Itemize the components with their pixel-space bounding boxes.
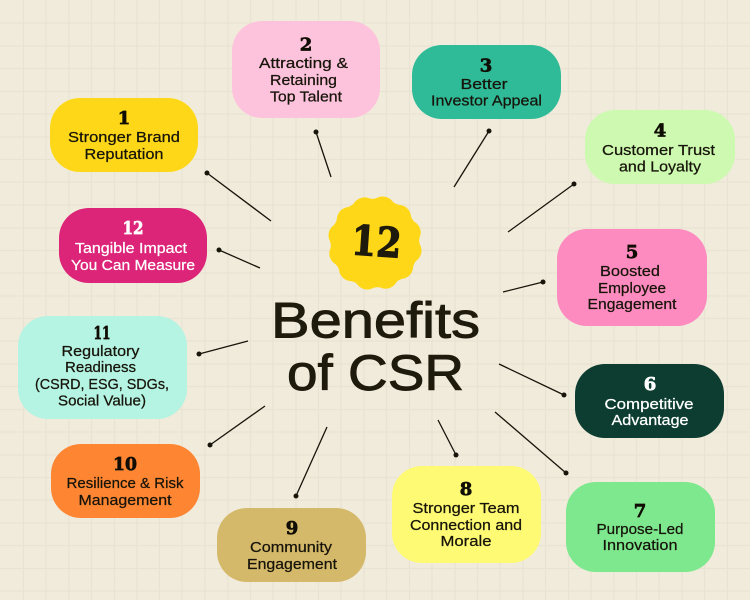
panel 2: Attracting and Retaining Top Talent: Retaining (270, 72, 337, 89)
panel 6: Competitive Advantage: 6 (644, 374, 656, 395)
panel 6: Competitive Advantage: Competitive (604, 396, 694, 413)
connector 1 (204, 170, 271, 221)
badge: 12: 12 (350, 216, 403, 268)
panel 9: Community Engagement (217, 508, 366, 582)
panel 10: Resilience and Risk Management (51, 444, 200, 518)
panel 2: Attracting and Retaining Top Talent: Attracting & (259, 55, 348, 72)
badge: 12 (329, 197, 421, 289)
panel 8: Stronger Team Connection and Morale: Connection and (410, 517, 522, 534)
panel 3: Better Investor Appeal: Better (460, 76, 508, 93)
panel 5: Boosted Employee Engagement (557, 229, 707, 326)
panel 2: Attracting and Retaining Top Talent (232, 21, 380, 118)
connector 2 (314, 130, 331, 177)
panel 11: Regulatory Readiness: (CSRD, ESG, SDGs, (35, 376, 169, 393)
panel 11: Regulatory Readiness (18, 316, 187, 419)
panel 12: Tangible Impact You Can Measure: Tangible Impact (75, 240, 188, 257)
panel 4: Customer Trust and Loyalty (585, 110, 735, 184)
panel 4: Customer Trust and Loyalty: Customer Trust (602, 142, 716, 159)
panel 12: Tangible Impact You Can Measure: You Can Measure (71, 257, 195, 274)
panel 9: Community Engagement: Engagement (247, 556, 338, 573)
panel 2: Attracting and Retaining Top Talent: Top Talent (270, 88, 343, 106)
panel 1: Stronger Brand Reputation: Stronger Brand (68, 129, 180, 146)
panel 4: Customer Trust and Loyalty: and Loyalty (619, 158, 702, 176)
panel 11: Regulatory Readiness: 11 (94, 323, 110, 344)
panel 3: Better Investor Appeal: Investor Appeal (431, 92, 542, 110)
panel 12: Tangible Impact You Can Measure (59, 208, 207, 283)
panel 8: Stronger Team Connection and Morale (392, 466, 541, 563)
panel 6: Competitive Advantage (575, 364, 724, 438)
connector 6 (499, 364, 566, 398)
connector 4 (508, 182, 576, 232)
panel 5: Boosted Employee Engagement: Engagement (588, 296, 677, 313)
panel 1: Stronger Brand Reputation: Reputation (84, 146, 164, 163)
connector 11 (196, 341, 248, 356)
panel 1: Stronger Brand Reputation: 1 (118, 108, 130, 129)
panel 5: Boosted Employee Engagement: Boosted (600, 263, 660, 280)
panel 8: Stronger Team Connection and Morale: Morale (440, 533, 492, 550)
panel 5: Boosted Employee Engagement: Employee (598, 280, 666, 297)
connector 7 (495, 412, 568, 476)
title: of CSR (287, 345, 464, 401)
panel 7: Purpose-Led Innovation: 7 (634, 501, 646, 522)
connector 12 (216, 248, 260, 268)
panel 10: Resilience and Risk Management: Resilience & Risk (66, 475, 184, 492)
panel 7: Purpose-Led Innovation (566, 482, 715, 572)
panel 8: Stronger Team Connection and Morale: Stronger Team (412, 500, 520, 517)
connector 5 (503, 280, 546, 292)
connector 8 (438, 420, 458, 458)
panel 5: Boosted Employee Engagement: 5 (626, 242, 638, 263)
panel 1: Stronger Brand Reputation (50, 98, 198, 172)
panel 2: Attracting and Retaining Top Talent: 2 (300, 34, 312, 56)
panel 9: Community Engagement: Community (250, 539, 333, 556)
connector 9 (294, 427, 327, 498)
panel 10: Resilience and Risk Management: 10 (113, 454, 137, 475)
panel 10: Resilience and Risk Management: Management (78, 492, 172, 509)
panel 4: Customer Trust and Loyalty: 4 (654, 120, 666, 142)
connector 10 (208, 406, 265, 448)
connector 3 (454, 128, 492, 187)
panel 11: Regulatory Readiness: Social Value) (58, 392, 146, 410)
title (271, 292, 480, 401)
panel 7: Purpose-Led Innovation: Purpose-Led (596, 521, 684, 538)
panel 3: Better Investor Appeal (412, 45, 561, 119)
panel 9: Community Engagement: 9 (286, 518, 298, 539)
panel 11: Regulatory Readiness: Regulatory (62, 343, 140, 360)
panel 6: Competitive Advantage: Advantage (612, 412, 688, 429)
title: Benefits (271, 292, 480, 348)
panel 8: Stronger Team Connection and Morale: 8 (460, 479, 472, 500)
panel 11: Regulatory Readiness: Readiness (65, 359, 136, 376)
panel 12: Tangible Impact You Can Measure: 12 (122, 218, 144, 239)
panel 7: Purpose-Led Innovation: Innovation (602, 537, 678, 554)
panel 3: Better Investor Appeal: 3 (480, 56, 492, 76)
